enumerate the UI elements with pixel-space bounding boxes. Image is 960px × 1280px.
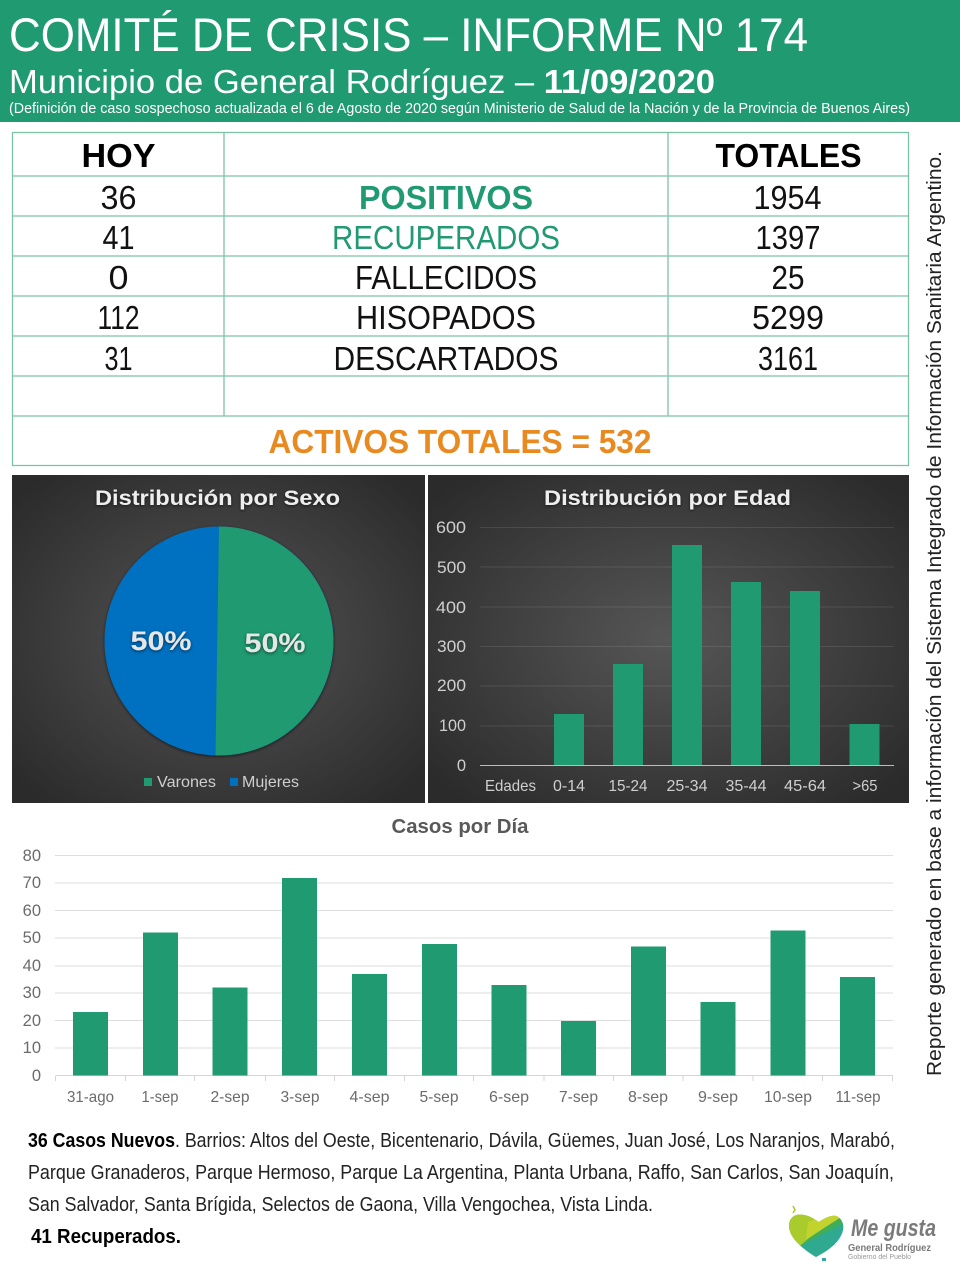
label: mujeres share: 50% — [130, 626, 192, 656]
bar chart: age: 25-34 — [666, 778, 708, 795]
chart: cases per day: 20 — [23, 1012, 41, 1030]
chart: cases per day: 0 — [32, 1067, 41, 1085]
summary table — [12, 132, 908, 466]
chart: cases per day: 40 — [23, 957, 41, 975]
chart: cases per day: 11-sep — [836, 1089, 881, 1106]
bar chart: age: 0-14 — [553, 778, 585, 795]
bar chart: age: Edades — [485, 778, 536, 795]
legend: Varones — [157, 774, 216, 791]
bar chart: age — [436, 519, 894, 795]
row: fallecidos: 0 — [108, 259, 128, 296]
panel: distribution by age — [428, 475, 909, 803]
heading: Casos por Día — [392, 816, 529, 838]
chart: cases per day: 3-sep — [280, 1089, 320, 1106]
logo tagline: Gobierno del Pueblo — [848, 1254, 911, 1261]
row: descartados: DESCARTADOS — [334, 340, 558, 377]
chart: cases per day: 31-ago — [67, 1089, 114, 1106]
chart: cases per day: 70 — [23, 874, 41, 892]
label: varones share: 50% — [244, 628, 306, 658]
subtitle with date: Municipio de General Rodríguez – 11/09/2020 — [9, 63, 715, 100]
legend — [144, 774, 299, 791]
bar chart: age: 400 — [436, 599, 466, 617]
new cases text block — [28, 1130, 895, 1248]
column heading: hoy: HOY — [82, 137, 156, 174]
header banner — [0, 0, 960, 122]
chart: cases per day: 1-sep — [142, 1089, 179, 1106]
row: hisopados: 112 — [98, 299, 140, 336]
bar chart: age: 15-24 — [608, 778, 648, 795]
chart: cases per day: 10 — [23, 1039, 41, 1057]
bar chart: age: 0 — [457, 757, 466, 775]
chart: cases per day: 80 — [23, 847, 41, 865]
row: descartados — [104, 340, 818, 377]
bar chart: age: >65 — [852, 778, 878, 795]
new cases text block: 41 Recuperados. — [31, 1226, 181, 1248]
bar chart: age: 300 — [437, 638, 466, 656]
bar chart: age: 600 — [436, 519, 466, 537]
chart: cases per day: 8-sep — [628, 1089, 668, 1106]
chart: cases per day: 50 — [23, 929, 41, 947]
row: positivos: POSITIVOS — [359, 179, 533, 216]
row: recuperados: 41 — [102, 219, 134, 256]
bar chart: age: 35-44 — [726, 778, 767, 795]
chart: cases per day: 9-sep — [698, 1089, 738, 1106]
bar chart: age: 45-64 — [784, 778, 826, 795]
new cases text block: San Salvador, Santa Brígida, Selectos de Gaona, Villa Vengochea, Vista Linda. — [28, 1194, 653, 1216]
chart: cases per day: 2-sep — [210, 1089, 250, 1106]
heading: Distribución por Sexo — [95, 487, 340, 510]
chart: cases per day: 5-sep — [420, 1089, 459, 1106]
title: COMITÉ DE CRISIS – INFORME Nº 174 — [9, 8, 808, 61]
chart: cases per day — [23, 816, 893, 1106]
row: recuperados: 1397 — [756, 219, 820, 256]
row: recuperados: RECUPERADOS — [332, 219, 560, 256]
row: descartados: 31 — [104, 340, 132, 377]
column heading: totales: TOTALES — [716, 137, 862, 174]
bar chart: age: 100 — [439, 717, 466, 735]
icon: heart — [789, 1206, 844, 1261]
case definition note: (Definición de caso sospechoso actualizada el 6 de Agosto de 2020 según Ministerio de Salud de la Nación y de la Provincia de Buenos Aires) — [9, 100, 910, 117]
logo: Me gusta General Rodríguez — [785, 1206, 936, 1261]
vertical source note: Reporte generado en base a información del Sistema Integrado de Información Sanitaria Argentino. — [924, 151, 946, 1076]
chart: cases per day: 6-sep — [489, 1089, 529, 1106]
logo municipality name: General Rodríguez — [848, 1243, 931, 1254]
new cases text block: 36 Casos Nuevos. Barrios: Altos del Oeste, Bicentenario, Dávila, Güemes, Juan José, Los Naranjos, Marabó, — [28, 1130, 895, 1152]
panel: distribution by sex — [12, 475, 425, 803]
chart: cases per day: 7-sep — [559, 1089, 598, 1106]
row: hisopados — [98, 299, 824, 336]
legend: Mujeres — [242, 774, 299, 791]
chart: cases per day: 30 — [23, 984, 41, 1002]
row: fallecidos: FALLECIDOS — [355, 259, 537, 296]
pie chart — [104, 526, 334, 756]
row: positivos: 36 — [100, 179, 136, 216]
chart: cases per day: 10-sep — [764, 1089, 812, 1106]
bar chart: age: 200 — [437, 677, 466, 695]
row: fallecidos: 25 — [772, 259, 804, 296]
heading: Distribución por Edad — [544, 487, 791, 510]
logo wordmark: Me gusta — [851, 1215, 936, 1242]
bar chart: age: 500 — [437, 559, 466, 577]
row: fallecidos — [108, 259, 804, 296]
row: descartados: 3161 — [758, 340, 818, 377]
row: positivos: 1954 — [754, 179, 822, 216]
active total: ACTIVOS TOTALES = 532 — [268, 423, 652, 460]
row: positivos — [100, 179, 822, 216]
chart: cases per day: 4-sep — [350, 1089, 390, 1106]
row: recuperados — [102, 219, 820, 256]
row: hisopados: HISOPADOS — [356, 299, 536, 336]
chart: cases per day: 60 — [23, 902, 41, 920]
row: hisopados: 5299 — [752, 299, 824, 336]
